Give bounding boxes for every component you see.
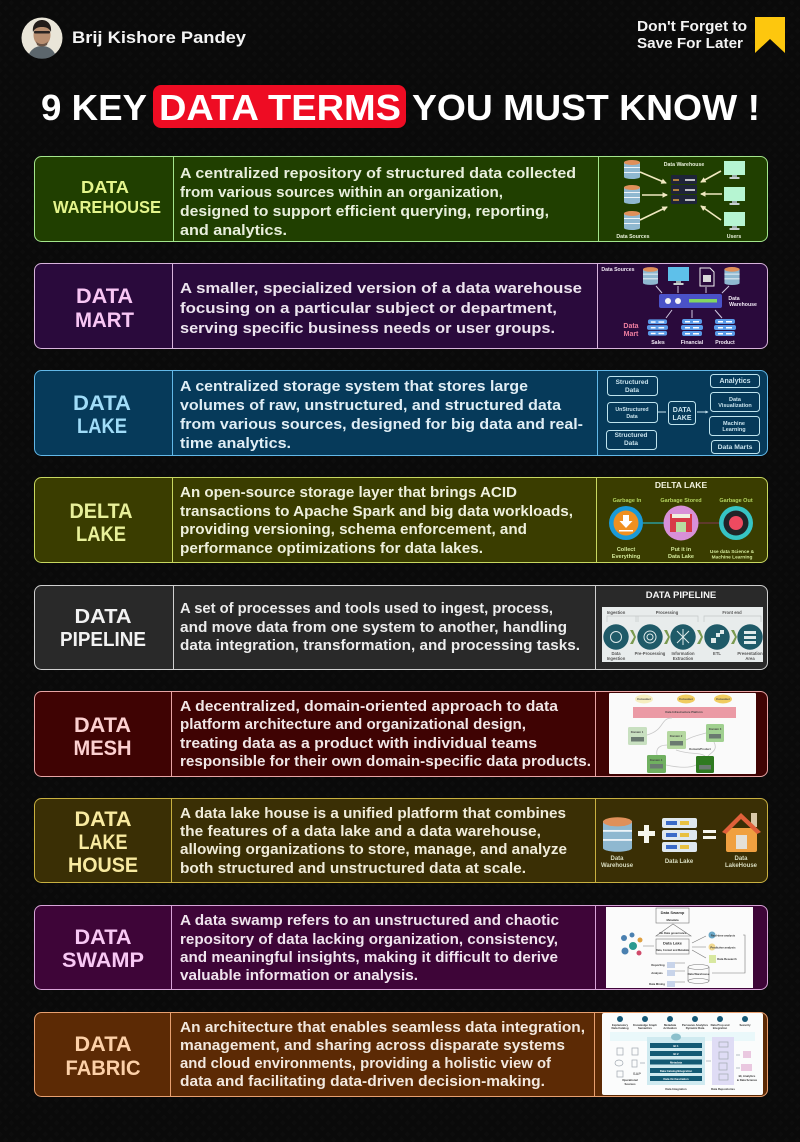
definition: data warehouse: and analytics. bbox=[180, 223, 287, 239]
diagram: data warehouse: Data Sources bbox=[616, 234, 650, 240]
diagram: data pipeline: Data bbox=[611, 651, 621, 656]
header: save reminder bbox=[637, 17, 785, 53]
diagram: data mart: Data bbox=[728, 296, 740, 302]
diagram: data swamp: Data Swamp bbox=[661, 910, 685, 915]
diagram: data fabric: Semantics bbox=[638, 1026, 652, 1030]
diagram: data fabric: Pervasive Analytics bbox=[682, 1023, 709, 1027]
definition: data lake: time analytics. bbox=[180, 436, 291, 452]
definition: data swamp bbox=[180, 913, 559, 984]
diagram: data lake: Structured bbox=[616, 379, 648, 386]
term: data warehouse: DATA bbox=[81, 177, 129, 197]
diagram: data lake: Data bbox=[625, 387, 639, 394]
diagram: data mart: Data Sources bbox=[601, 267, 635, 273]
diagram: data mesh: Domain 1 bbox=[631, 730, 644, 734]
diagram: data fabric: Security bbox=[739, 1023, 751, 1027]
diagram: data swamp: Real-time analysis bbox=[711, 934, 736, 938]
diagram: data lake bbox=[606, 374, 760, 454]
diagram: data mart: Data bbox=[623, 323, 639, 330]
definition: data warehouse: from various sources within an organization, bbox=[180, 185, 503, 201]
author name: Brij Kishore Pandey bbox=[72, 28, 247, 47]
term: delta lake: DELTA bbox=[70, 500, 132, 523]
reminder text: Don't Forget to bbox=[637, 19, 747, 35]
term: data lake bbox=[73, 392, 131, 438]
term: data warehouse: WAREHOUSE bbox=[53, 197, 161, 217]
definition: data pipeline bbox=[180, 601, 580, 654]
diagram: delta lake: Everything bbox=[612, 554, 640, 560]
definition: data fabric: data and facilitating data-driven decision-making. bbox=[180, 1074, 545, 1090]
title: YOU MUST KNOW ! bbox=[412, 87, 760, 128]
diagram: data swamp: Data Research bbox=[717, 957, 737, 961]
diagram: data mesh: Consumer bbox=[679, 697, 694, 701]
diagram: data warehouse: Data Warehouse bbox=[664, 162, 704, 168]
diagram: data lake: Learning bbox=[722, 427, 746, 433]
term: data swamp bbox=[62, 926, 144, 972]
term: data mart: MART bbox=[75, 309, 134, 332]
diagram: data fabric: Knowledge Graph bbox=[633, 1023, 657, 1027]
term: data fabric: DATA bbox=[74, 1033, 132, 1056]
title: 9 KEY bbox=[41, 87, 147, 128]
diagram: data fabric: Data Catalog/Integration bbox=[660, 1069, 692, 1073]
definition: data warehouse bbox=[180, 166, 576, 239]
term: data lake house: DATA bbox=[74, 808, 132, 831]
diagram: data fabric: Activation bbox=[663, 1026, 677, 1030]
diagram: data lake: Data bbox=[626, 414, 638, 420]
diagram: data fabric: Data Repositories bbox=[711, 1087, 735, 1091]
diagram: data lake: UnStructured bbox=[615, 407, 649, 413]
diagram: delta lake: Use data Science & bbox=[710, 549, 755, 555]
diagram: data mart: Financial bbox=[681, 340, 704, 346]
diagram: data swamp: Data Lake bbox=[663, 940, 683, 946]
diagram: data swamp: Analysis bbox=[651, 971, 663, 975]
definition: data pipeline: data integration, transformation, and processing tasks. bbox=[180, 638, 580, 654]
diagram: data mesh: Domain/Product bbox=[689, 747, 711, 751]
term: data mesh bbox=[74, 714, 132, 760]
diagram: data fabric: Data Catalog bbox=[611, 1026, 629, 1030]
diagram: data swamp: Reporting bbox=[651, 963, 665, 967]
diagram: data lake house: Warehouse bbox=[601, 863, 634, 869]
diagram: data lake house bbox=[601, 813, 761, 869]
term: data mart: DATA bbox=[76, 285, 133, 308]
term: data mesh: DATA bbox=[74, 714, 131, 737]
diagram: data mesh: Data Infrastructure Platform bbox=[665, 710, 703, 714]
term: data lake house: HOUSE bbox=[68, 854, 138, 877]
term: data pipeline bbox=[60, 606, 146, 651]
definition: data fabric: management, and sharing across disparate systems bbox=[180, 1038, 565, 1054]
diagram: delta lake bbox=[609, 480, 755, 560]
diagram: data swamp: Predictive analysis bbox=[710, 946, 736, 950]
definition: delta lake: providing versioning, schema enforcement, and bbox=[180, 522, 527, 538]
diagram: delta lake: Garbage In bbox=[613, 498, 642, 504]
definition: delta lake: performance optimizations for data lakes. bbox=[180, 541, 483, 557]
diagram: data mesh: Domain 3 bbox=[709, 727, 722, 731]
definition: data mesh: platform architecture and organizational design, bbox=[180, 717, 526, 733]
definition: data warehouse: A centralized repository of structured data collected bbox=[180, 166, 576, 182]
diagram: delta lake: Collect bbox=[617, 547, 635, 553]
diagram: data mart: Mart bbox=[624, 331, 639, 338]
diagram: data fabric: SAP bbox=[633, 1071, 641, 1076]
diagram: data lake: Visualization bbox=[718, 403, 752, 409]
diagram: delta lake: Machine Learning bbox=[712, 554, 752, 560]
diagram: data fabric: Data Prep and bbox=[711, 1023, 730, 1027]
diagram: data pipeline: Processing bbox=[656, 610, 679, 615]
diagram: delta lake: Garbage Out bbox=[719, 498, 753, 504]
diagram: data pipeline: Extraction bbox=[673, 656, 694, 661]
diagram: data pipeline: Presentation bbox=[737, 651, 763, 656]
panel: data mesh bbox=[34, 692, 768, 776]
definition: data swamp: and meaningful insights, making it difficult to derive bbox=[180, 950, 558, 966]
term: delta lake: LAKE bbox=[76, 523, 126, 546]
definition: data warehouse: designed to support efficient querying, reporting, bbox=[180, 204, 549, 220]
diagram: data fabric: Sources bbox=[624, 1082, 636, 1086]
diagram: data lake house: Data bbox=[734, 856, 748, 862]
diagram: data pipeline: Area bbox=[745, 656, 755, 661]
diagram: data lake: Data Marts bbox=[718, 444, 753, 451]
diagram: data fabric: Metadata bbox=[664, 1023, 677, 1027]
term: data lake: DATA bbox=[73, 392, 131, 415]
diagram: data fabric: Operational bbox=[622, 1078, 638, 1082]
definition: data lake house: A data lake house is a unified platform that combines bbox=[180, 806, 566, 822]
definition: data lake house: both structured and unstructured data at scale. bbox=[180, 861, 526, 877]
definition: delta lake: transactions to Apache Spark and big data workloads, bbox=[180, 504, 573, 520]
definition: data lake house: allowing organizations to store, manage, and analyze bbox=[180, 842, 567, 858]
term: data lake: LAKE bbox=[77, 415, 127, 438]
definition: data fabric: and cloud environments, providing a holistic view of bbox=[180, 1056, 551, 1072]
panel: data warehouse bbox=[34, 156, 768, 242]
diagram: data mesh: Consumer bbox=[637, 697, 652, 701]
diagram: data swamp bbox=[606, 907, 753, 988]
diagram: delta lake: Garbage Stored bbox=[660, 498, 702, 504]
diagram: data lake house: LakeHouse bbox=[725, 863, 758, 869]
definition: data lake bbox=[180, 379, 583, 452]
definition: data mart: A smaller, specialized version of a data warehouse bbox=[180, 281, 582, 297]
diagram: data lake: DATA bbox=[673, 407, 691, 414]
panel: data fabric bbox=[34, 1012, 768, 1096]
icon: bookmark bbox=[755, 17, 785, 53]
definition: data swamp: repository of data lacking organization, consistency, bbox=[180, 932, 558, 948]
diagram: delta lake: Put it in bbox=[671, 547, 692, 553]
diagram: data fabric: Metadata bbox=[670, 1060, 683, 1064]
term: data mesh: MESH bbox=[74, 737, 132, 760]
definition: data lake: from various sources, designed for big data and real- bbox=[180, 417, 583, 433]
diagram: data mart: Product bbox=[715, 340, 735, 346]
diagram: data swamp: No Data governance bbox=[659, 931, 687, 935]
definition: data mart: serving specific business needs or user groups. bbox=[180, 321, 555, 337]
definition: data swamp: A data swamp refers to an unstructured and chaotic bbox=[180, 913, 559, 929]
diagram: data mesh: Domain 2 bbox=[670, 734, 683, 738]
term: data swamp: DATA bbox=[74, 926, 132, 949]
diagram: data mart: Warehouse bbox=[729, 302, 757, 308]
diagram: data lake: Data bbox=[729, 397, 742, 403]
diagram: data lake house: Data Lake bbox=[665, 859, 694, 865]
diagram: data lake house: Data bbox=[610, 856, 624, 862]
definition: data mart: focusing on a particular subject or department, bbox=[180, 301, 557, 317]
diagram: data pipeline: Front end bbox=[722, 610, 742, 615]
diagram: data pipeline: Ingestion bbox=[607, 610, 626, 615]
diagram: data lake: Analytics bbox=[719, 378, 751, 385]
term: data fabric bbox=[66, 1033, 140, 1080]
diagram: delta lake: Data Lake bbox=[668, 554, 694, 560]
diagram: data fabric: BI 1 bbox=[673, 1044, 679, 1048]
header: author bbox=[22, 18, 247, 59]
definition: data mesh: A decentralized, domain-oriented approach to data bbox=[180, 699, 559, 715]
diagram: data fabric: Integration bbox=[713, 1026, 728, 1030]
diagram: data lake: Structured bbox=[615, 432, 647, 439]
term: data lake house: LAKE bbox=[78, 831, 128, 854]
diagram: data fabric: Data Integration bbox=[665, 1087, 687, 1091]
definition: data mesh: treating data as a product with individual teams bbox=[180, 736, 537, 752]
title: DATA TERMS bbox=[159, 87, 401, 128]
diagram: data swamp: Data, Context and Metadata bbox=[656, 949, 689, 952]
definition: data lake house bbox=[180, 806, 567, 877]
diagram: data swamp: Metadata bbox=[666, 918, 679, 922]
definition: data fabric: An architecture that enables seamless data integration, bbox=[180, 1020, 585, 1036]
diagram: data lake: Data bbox=[624, 440, 638, 447]
diagram: data fabric: BI, Analytics bbox=[739, 1074, 756, 1078]
reminder text bbox=[637, 19, 747, 52]
title bbox=[41, 85, 760, 128]
panel: data pipeline bbox=[34, 586, 768, 670]
icon: author avatar bbox=[22, 18, 62, 59]
diagram: data pipeline: Information bbox=[671, 651, 695, 656]
definition: delta lake bbox=[180, 485, 573, 557]
diagram: data pipeline: Pre-Processing bbox=[635, 651, 666, 656]
diagram: data fabric bbox=[602, 1013, 763, 1095]
term: data warehouse bbox=[53, 177, 161, 217]
definition: data mesh: responsible for their own domain-specific data products. bbox=[180, 754, 591, 770]
definition: data pipeline: and move data from one system to another, handling bbox=[180, 620, 567, 636]
definition: delta lake: An open-source storage layer that brings ACID bbox=[180, 485, 517, 501]
panel: data mart bbox=[34, 264, 768, 348]
diagram: data mesh: Domain 4 bbox=[650, 758, 663, 762]
diagram: data mesh: Consumer bbox=[716, 697, 731, 701]
definition: data fabric bbox=[180, 1020, 585, 1090]
diagram: data pipeline: DATA PIPELINE bbox=[646, 590, 716, 601]
term: data swamp: SWAMP bbox=[62, 949, 144, 972]
panel: data lake bbox=[34, 370, 768, 456]
diagram: data warehouse bbox=[616, 160, 745, 240]
definition: data mesh bbox=[180, 699, 591, 770]
diagram: data mart bbox=[601, 267, 757, 346]
diagram: data pipeline bbox=[602, 590, 763, 662]
term: data pipeline: PIPELINE bbox=[60, 629, 146, 651]
definition: data pipeline: A set of processes and tools used to ingest, process, bbox=[180, 601, 553, 617]
diagram: data swamp: Data Warehouse bbox=[688, 972, 710, 976]
reminder text: Save For Later bbox=[637, 36, 743, 52]
diagram: data fabric: Explanatory bbox=[612, 1023, 628, 1027]
term: data mart bbox=[75, 285, 134, 332]
term: data fabric: FABRIC bbox=[66, 1057, 140, 1080]
term: data lake house bbox=[68, 808, 138, 877]
diagram: data lake: LAKE bbox=[672, 415, 692, 422]
diagram: data mesh bbox=[609, 693, 756, 774]
diagram: data fabric: BI 2 bbox=[673, 1052, 679, 1056]
definition: data lake house: the features of a data lake and a data warehouse, bbox=[180, 824, 541, 840]
term: delta lake bbox=[70, 500, 132, 546]
diagram: data fabric: Data Orchestration bbox=[663, 1077, 689, 1081]
diagram: data lake: Machine bbox=[723, 421, 745, 427]
diagram: data mart: Sales bbox=[651, 340, 665, 346]
diagram: data warehouse: Users bbox=[727, 234, 741, 240]
panel: data swamp bbox=[34, 906, 768, 990]
diagram: data swamp: Data Mining bbox=[649, 982, 665, 986]
definition: data lake: volumes of raw, unstructured, and structured data bbox=[180, 398, 562, 414]
diagram: data fabric: & Data Science bbox=[737, 1078, 758, 1082]
definition: data mart bbox=[180, 281, 582, 337]
diagram: data fabric: Dynamic Data bbox=[686, 1026, 705, 1030]
definition: data lake: A centralized storage system that stores large bbox=[180, 379, 528, 395]
diagram: delta lake: DELTA LAKE bbox=[655, 480, 707, 490]
definition: data swamp: valuable information or analysis. bbox=[180, 968, 418, 984]
panel: data lake house bbox=[34, 798, 768, 882]
diagram: data pipeline: ETL bbox=[713, 651, 721, 656]
term: data pipeline: DATA bbox=[74, 606, 132, 628]
panel: delta lake bbox=[34, 478, 768, 562]
diagram: data pipeline: Ingestion bbox=[607, 656, 626, 661]
